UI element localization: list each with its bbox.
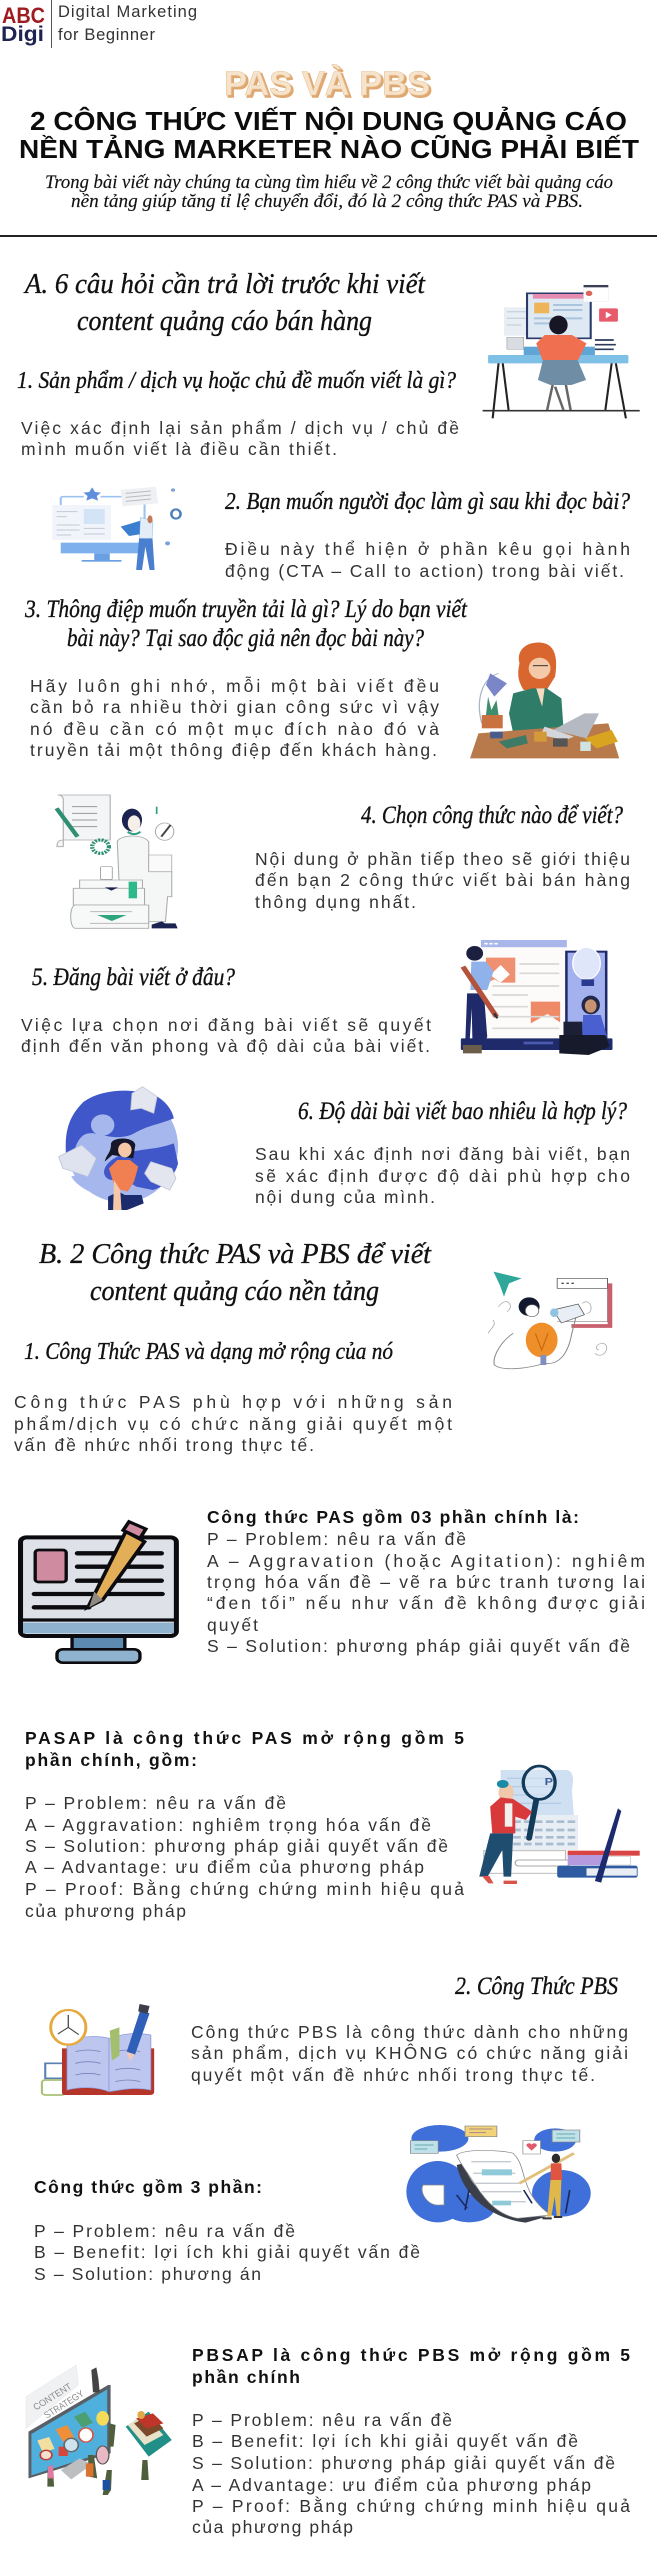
PASAP formula text — [25, 1728, 464, 1921]
PBSAP formula text — [192, 2345, 630, 2537]
icon: woman working at desk — [470, 642, 619, 758]
PASAP formula text: của phương pháp — [25, 1901, 186, 1921]
question 1 text: mình muốn viết là điều cần thiết. — [21, 439, 337, 459]
logo: ABC Digi: Digi — [1, 23, 44, 46]
question 1 heading: 1. Sản phẩm / dịch vụ hoặc chủ đề muốn viết là gì? — [17, 368, 456, 394]
question 1 text — [21, 418, 459, 459]
question 2 text: Điều này thể hiện ở phần kêu gọi hành — [225, 539, 630, 559]
PAS formula text: S – Solution: phương pháp giải quyết vấn đề — [207, 1636, 630, 1656]
question 3 text — [30, 675, 439, 760]
PAS formula text — [207, 1507, 645, 1656]
PBSAP formula text: PBSAP là công thức PBS mở rộng gồm 5 — [192, 2345, 630, 2365]
PASAP formula text: P – Problem: nêu ra vấn đề — [25, 1793, 286, 1813]
heading B: B. 2 Công thức PAS và PBS để viết — [39, 1238, 432, 1270]
icon: person at desk — [483, 285, 640, 418]
main title: NỀN TẢNG MARKETER NÀO CŨNG PHẢI BIẾT — [19, 134, 639, 164]
PBSAP formula text: A – Advantage: ưu điểm của phương pháp — [192, 2475, 591, 2495]
question 3 text: truyền tải một thông điệp đến khách hàng. — [30, 740, 437, 760]
icon: content strategy isometric screen — [26, 2365, 172, 2495]
question 3 text: Hãy luôn ghi nhớ, mỗi một bài viết đều — [30, 675, 439, 696]
subtitle: Trong bài viết này chúng ta cùng tìm hiểu về 2 công thức viết bài quảng cáo — [45, 172, 613, 193]
section 1 heading: 1. Công Thức PAS và dạng mở rộng của nó — [24, 1339, 393, 1365]
PAS formula text: A – Aggravation (hoặc Agitation): nghiêm — [207, 1551, 645, 1571]
PAS formula text: quyết — [207, 1615, 258, 1635]
icon: open book with clock and pencil — [42, 2004, 154, 2095]
question 6 text: sẽ xác định được độ dài phù hợp cho — [255, 1166, 630, 1186]
question 5 text: Việc lựa chọn nơi đăng bài viết sẽ quyết — [21, 1015, 431, 1035]
title tag: PAS và PBS: PAS VÀ PBS — [226, 67, 432, 105]
icon: monitor with pencil — [21, 1522, 176, 1663]
section 1 text — [14, 1392, 452, 1455]
question 3 text: nó đều cần có một mục đích nào đó và — [30, 719, 439, 739]
logo: ABC Digi: Digital Marketing — [58, 3, 197, 21]
PASAP formula text: A – Aggravation: nghiêm trọng hóa vấn đề — [25, 1815, 431, 1835]
question 2 text — [225, 539, 630, 581]
icon text: content strategy: CONTENT — [31, 2382, 76, 2412]
question 3 text: cần bỏ ra nhiều thời gian công sức vì vậy — [30, 697, 439, 717]
icon: man writing on long paper with chat bubbles — [406, 2125, 591, 2223]
PBSAP formula text: P – Problem: nêu ra vấn đề — [192, 2410, 452, 2430]
main title — [19, 106, 639, 164]
logo: ABC Digi: ABC — [2, 3, 45, 28]
title tag: PAS và PBS: PAS VÀ PBS — [224, 65, 430, 103]
question 3 heading: bài này? Tại sao độc giả nên đọc bài này? — [67, 625, 424, 652]
section 1 text: vấn đề nhức nhối trong thực tế. — [14, 1435, 314, 1455]
icon: man presenting at blue monitor — [52, 487, 181, 570]
PASAP formula text: P – Proof: Bằng chứng chứng minh hiệu quả — [25, 1878, 464, 1899]
icon: idea lightbulb person with paper plane — [488, 1272, 610, 1369]
PBSAP formula text: P – Proof: Bằng chứng chứng minh hiệu quả — [192, 2495, 630, 2516]
section 2 heading: 2. Công Thức PBS — [455, 1973, 618, 2000]
PASAP formula text: phần chính, gồm: — [25, 1750, 197, 1770]
PBS formula text: B – Benefit: lợi ích khi giải quyết vấn đề — [34, 2242, 420, 2262]
heading A — [23, 268, 426, 337]
PBS formula text: P – Problem: nêu ra vấn đề — [34, 2221, 295, 2241]
icon text: content strategy: STRATEGY — [42, 2389, 88, 2421]
PASAP formula text: A – Advantage: ưu điểm của phương pháp — [25, 1857, 424, 1877]
PASAP formula text: S – Solution: phương pháp giải quyết vấn đề — [25, 1836, 448, 1856]
question 4 text: đến bạn 2 công thức viết bài bán hàng — [255, 870, 630, 890]
PBS formula text — [34, 2177, 420, 2284]
PAS formula text: P – Problem: nêu ra vấn đề — [207, 1529, 466, 1549]
logo: ABC Digi: for Beginner — [58, 26, 156, 44]
question 6 text: nội dung của mình. — [255, 1187, 435, 1207]
PAS formula text: Công thức PAS gồm 03 phần chính là: — [207, 1507, 579, 1527]
question 4 text — [255, 849, 630, 912]
heading A: content quảng cáo bán hàng — [77, 305, 372, 337]
question 3 heading: 3. Thông điệp muốn truyền tải là gì? Lý do bạn viết — [24, 596, 468, 623]
PAS formula text: trọng hóa vấn đề – vẽ ra bức tranh tương lai — [207, 1572, 645, 1592]
PBS description text: quyết một vấn đề nhức nhối trong thực tế. — [191, 2065, 595, 2085]
icon text: content strategy — [31, 2380, 88, 2422]
question 6 text: Sau khi xác định nơi đăng bài viết, bạn — [255, 1144, 630, 1164]
icon: person on books with scroll — [57, 795, 178, 928]
logo: ABC Digi — [1, 0, 197, 48]
icon: woman with magnifier and typewriter: P — [545, 1777, 553, 1788]
question 4 text: thông dụng nhất. — [255, 892, 416, 912]
heading B: content quảng cáo nền tảng — [90, 1275, 379, 1307]
question 1 text: Việc xác định lại sản phẩm / dịch vụ / chủ đề — [21, 418, 459, 438]
subtitle: nền tảng giúp tăng tỉ lệ chuyển đổi, đó là 2 công thức PAS và PBS. — [71, 191, 583, 212]
question 5 heading: 5. Đăng bài viết ở đâu? — [32, 964, 235, 991]
PASAP formula text: PASAP là công thức PAS mở rộng gồm 5 — [25, 1728, 464, 1748]
PBS description text: sản phẩm, dịch vụ KHÔNG có chức năng giải — [191, 2042, 628, 2063]
icon: woman with magnifier and typewriter — [479, 1766, 640, 1884]
heading A: A. 6 câu hỏi cần trả lời trước khi viết — [23, 268, 426, 300]
PBS description text: Công thức PBS là công thức dành cho những — [191, 2022, 628, 2042]
question 5 text: định đến văn phong và độ dài của bài viết. — [21, 1036, 430, 1056]
PBSAP formula text: B – Benefit: lợi ích khi giải quyết vấn đề — [192, 2431, 578, 2451]
question 3 heading — [24, 596, 468, 652]
PAS formula text: “đen tối” nếu như vấn đề không được giải — [207, 1593, 645, 1613]
icon: two women with article page — [461, 940, 612, 1055]
heading B — [39, 1238, 432, 1307]
section 1 text: Công thức PAS phù hợp với những sản — [14, 1392, 452, 1412]
icon: girl reading on globe of books — [59, 1087, 178, 1210]
question 2 text: động (CTA – Call to action) trong bài viết. — [225, 561, 624, 581]
section 1 text: phẩm/dịch vụ có chức năng giải quyết một — [14, 1414, 452, 1434]
PBS formula text: Công thức gồm 3 phần: — [34, 2177, 262, 2197]
PBSAP formula text: phần chính — [192, 2367, 300, 2387]
main title: 2 CÔNG THỨC VIẾT NỘI DUNG QUẢNG CÁO — [30, 106, 627, 136]
question 5 text — [21, 1015, 431, 1056]
PBS description text — [191, 2022, 628, 2085]
question 6 text — [255, 1144, 630, 1207]
subtitle — [45, 172, 613, 212]
PBSAP formula text: S – Solution: phương pháp giải quyết vấn đề — [192, 2453, 615, 2473]
question 4 text: Nội dung ở phần tiếp theo sẽ giới thiệu — [255, 849, 630, 869]
PBS formula text: S – Solution: phương án — [34, 2264, 261, 2284]
PBSAP formula text: của phương pháp — [192, 2517, 353, 2537]
